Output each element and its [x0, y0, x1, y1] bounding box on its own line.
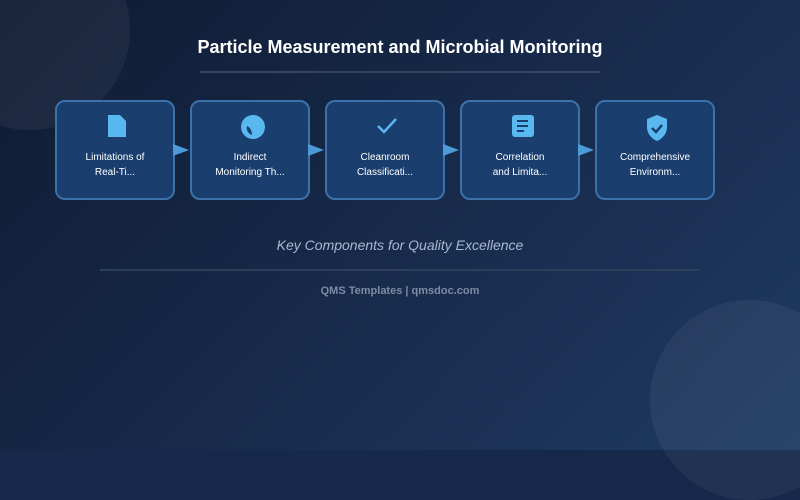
arrow 4 — [578, 144, 594, 156]
arrow 1 — [173, 144, 189, 156]
panel: step 1: Limitations of — [86, 152, 144, 163]
panel: step 2: Monitoring Th... — [215, 167, 285, 178]
panel: step 4: and Limita... — [493, 167, 547, 178]
panel: step 5 — [595, 100, 715, 200]
arrow 2 — [308, 144, 324, 156]
arrow 3 — [443, 144, 459, 156]
panel: step 5: Comprehensive — [620, 152, 690, 163]
panel: step 4 — [460, 100, 580, 200]
panel: step 2 — [190, 100, 310, 200]
icon: list document — [512, 115, 534, 137]
icon: shield check — [647, 115, 667, 141]
panel: step 5: Environm... — [630, 167, 680, 178]
panel: step 1: Real-Ti... — [95, 167, 135, 178]
panel: step 3 — [325, 100, 445, 200]
panel: step 3: Cleanroom — [361, 152, 409, 163]
icon: check — [377, 118, 397, 134]
icon: document — [108, 115, 126, 137]
panel: step 3: Classificati... — [357, 167, 413, 178]
icon: leaf — [241, 115, 265, 139]
footer: QMS Templates | qmsdoc.com — [321, 285, 479, 297]
title: Particle Measurement and Microbial Monitoring — [197, 37, 603, 57]
panel: step 4: Correlation — [496, 152, 544, 163]
subtitle: Key Components for Quality Excellence — [277, 237, 523, 253]
panel: step 2: Indirect — [234, 152, 266, 163]
panel: step 1 — [55, 100, 175, 200]
